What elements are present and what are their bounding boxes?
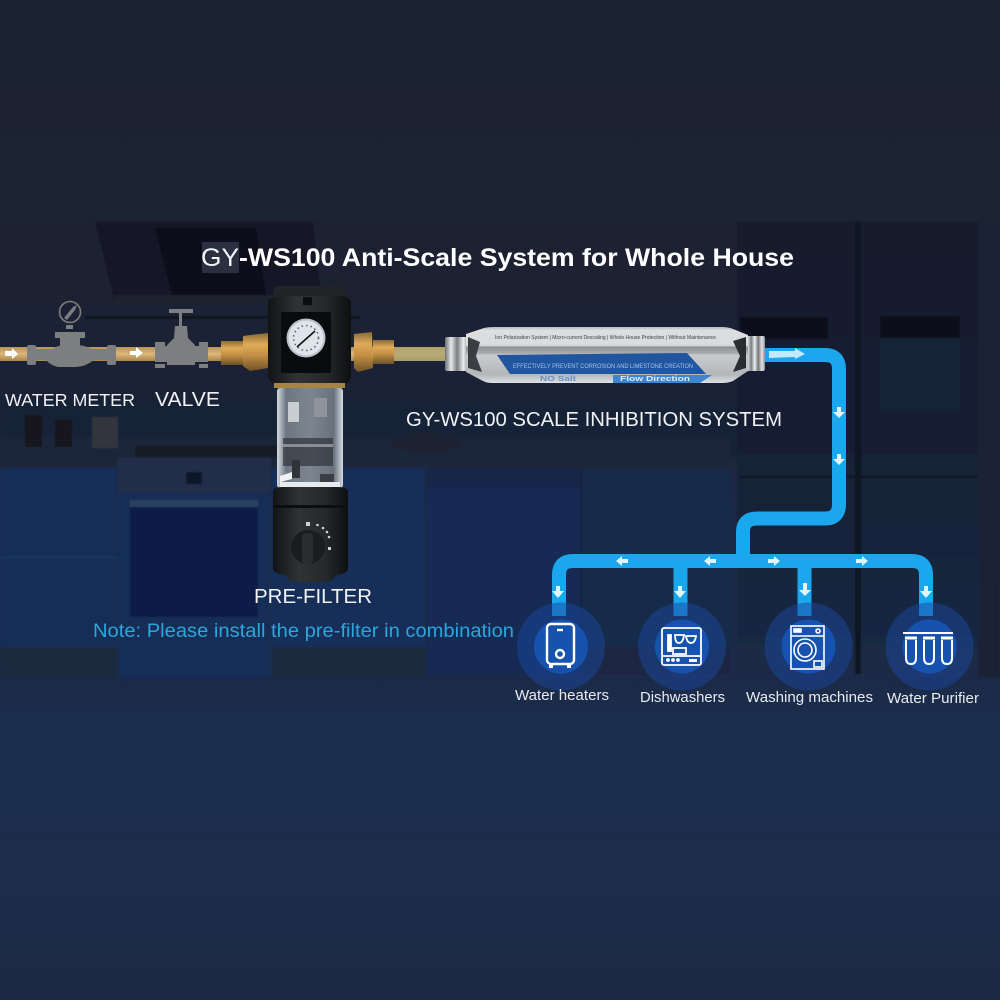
label: scale inhibition system: GY-WS100 SCALE INHIBITION SYSTEM [406,409,782,431]
brass collar [274,383,345,388]
title: -WS100 Anti-Scale System for Whole House [239,244,794,272]
outer halos [517,602,974,690]
kitchen background photo [0,222,1000,678]
flow arrows on brass pipe [5,347,143,359]
counter and backsplash [0,415,730,468]
note: Note: Please install the pre-filter in combination [93,621,514,642]
label: water heaters: Water heaters [515,688,609,704]
icon: water meter [27,302,116,367]
brass fittings [221,332,394,372]
icon: dishwasher [662,628,701,665]
threaded ends [445,336,765,371]
blue label band: Flow Direction [620,376,690,383]
device circles [517,602,974,690]
label: pre-filter: PRE-FILTER [254,586,372,608]
label: water meter: WATER METER [5,390,135,410]
blue outlet pipe network [559,355,926,616]
title: GY [201,244,239,272]
transparent bowl [277,388,343,488]
icon: water purifier [903,633,953,664]
refrigerator [737,222,1000,678]
oven [118,458,271,678]
blue label band: EFFECTIVELY PREVENT CORROSION AND LIMESTONE CREATION [513,363,693,370]
blue label band [497,353,712,383]
range hood [85,222,360,319]
chrome body [466,327,748,383]
pressure gauge [286,318,326,358]
label: dishwashers: Dishwashers [640,690,725,706]
left cabinets [0,468,117,678]
scale inhibition cylinder [445,327,765,383]
filter base with dial [273,487,348,582]
icon: valve [155,309,208,368]
dark reflective ends [468,337,746,372]
label: water purifier: Water Purifier [887,691,979,707]
flow arrows on blue pipe [552,348,932,598]
filter head [268,286,351,385]
label: washing machines: Washing machines [746,690,873,706]
base cabinet and dishwasher [272,468,730,678]
inner discs [534,620,956,674]
blue label band: NO Salt [540,376,577,383]
water inlet pipe [0,347,445,361]
label: valve: VALVE [155,389,220,411]
icon: water heater [547,624,574,668]
feature line: Ion Polarization System | Micro-current Descaling | Whole House Protection | Without Maintenance [495,335,716,341]
pre-filter unit [221,286,394,582]
icon: washing machine [791,626,824,669]
